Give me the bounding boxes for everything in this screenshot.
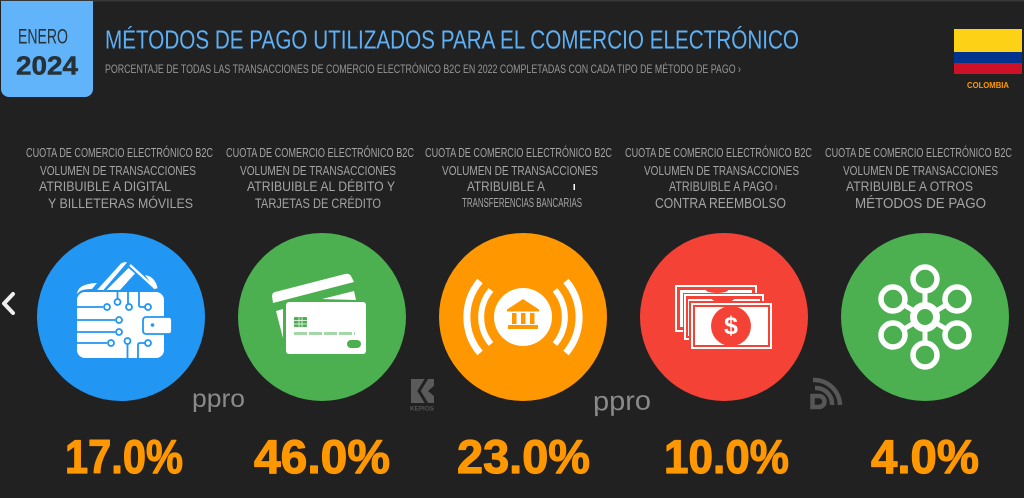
value: other methods: 4.0%: [871, 431, 979, 484]
logo: Kepios: KEPIOS: [410, 406, 434, 412]
flag: Colombia: [954, 29, 1022, 90]
date badge: [1, 1, 93, 97]
text block: cards: CUOTA DE COMERCIO ELECTRÓNICO B2C: [226, 145, 414, 160]
text block: cash on delivery: CONTRA REEMBOLSO: [655, 195, 786, 212]
text block: other methods: ATRIBUIBLE A OTROS: [846, 179, 973, 194]
icon: cash: [640, 233, 808, 401]
text block: cash on delivery: [625, 145, 812, 212]
text block: cards: ATRIBUIBLE AL DÉBITO Y: [247, 179, 395, 194]
text block: bank transfers: VOLUMEN DE TRANSACCIONES: [442, 163, 598, 178]
logo: signal: [812, 380, 840, 407]
text block: cash on delivery: ATRIBUIBLE A PAGO: [669, 179, 773, 194]
text block: cards: TARJETAS DE CRÉDITO: [255, 196, 381, 211]
text block: bank transfers: ATRIBUIBLE A: [467, 179, 545, 194]
value: cash on delivery: 10.0%: [664, 431, 789, 484]
text block: bank transfers: TRANSFERENCIAS BANCARIAS: [462, 195, 582, 210]
text block: other methods: MÉTODOS DE PAGO: [855, 195, 986, 212]
icon: credit cards: [238, 233, 406, 401]
text block: bank transfers: [425, 145, 612, 210]
text block: cash on delivery: VOLUMEN DE TRANSACCIONES: [644, 163, 799, 178]
text block: cards: VOLUMEN DE TRANSACCIONES: [240, 163, 396, 178]
text block: other methods: [825, 145, 1012, 212]
text block: digital wallets: ATRIBUIBLE A DIGITAL: [39, 179, 171, 194]
icon: network of other methods: [841, 233, 1009, 401]
back arrow: [4, 294, 13, 313]
value: cards: 46.0%: [254, 431, 390, 484]
icon: digital wallet: [37, 233, 205, 401]
text block: cash on delivery: CUOTA DE COMERCIO ELECTRÓNICO B2C: [625, 145, 812, 160]
icon: cash: $: [724, 312, 738, 340]
date badge: 2024: [16, 50, 79, 80]
value: digital wallets: 17.0%: [65, 431, 183, 484]
text block: digital wallets: CUOTA DE COMERCIO ELECTRÓNICO B2C: [26, 145, 213, 160]
text block: digital wallets: VOLUMEN DE TRANSACCIONES: [40, 163, 196, 178]
subtitle: PORCENTAJE DE TODAS LAS TRANSACCIONES DE COMERCIO ELECTRÓNICO B2C EN 2022 COMPLETADAS CON CADA TIPO DE MÉTODO DE PAGO ›: [105, 61, 741, 76]
value: bank transfers: 23.0%: [457, 431, 590, 484]
text block: cards: [226, 145, 414, 211]
text block: digital wallets: Y BILLETERAS MÓVILES: [48, 195, 193, 211]
title: MÉTODOS DE PAGO UTILIZADOS PARA EL COMERCIO ELECTRÓNICO: [105, 24, 799, 54]
logo: ppro left: ppro: [192, 385, 245, 413]
icon: bank transfer: [439, 233, 607, 401]
text block: digital wallets: [26, 145, 213, 211]
text block: bank transfers: CUOTA DE COMERCIO ELECTRÓNICO B2C: [425, 145, 612, 160]
logo: ppro right: ppro: [593, 385, 651, 417]
date badge: ENERO: [18, 26, 68, 48]
flag: Colombia: COLOMBIA: [967, 81, 1009, 90]
logo: Kepios: [410, 378, 435, 412]
